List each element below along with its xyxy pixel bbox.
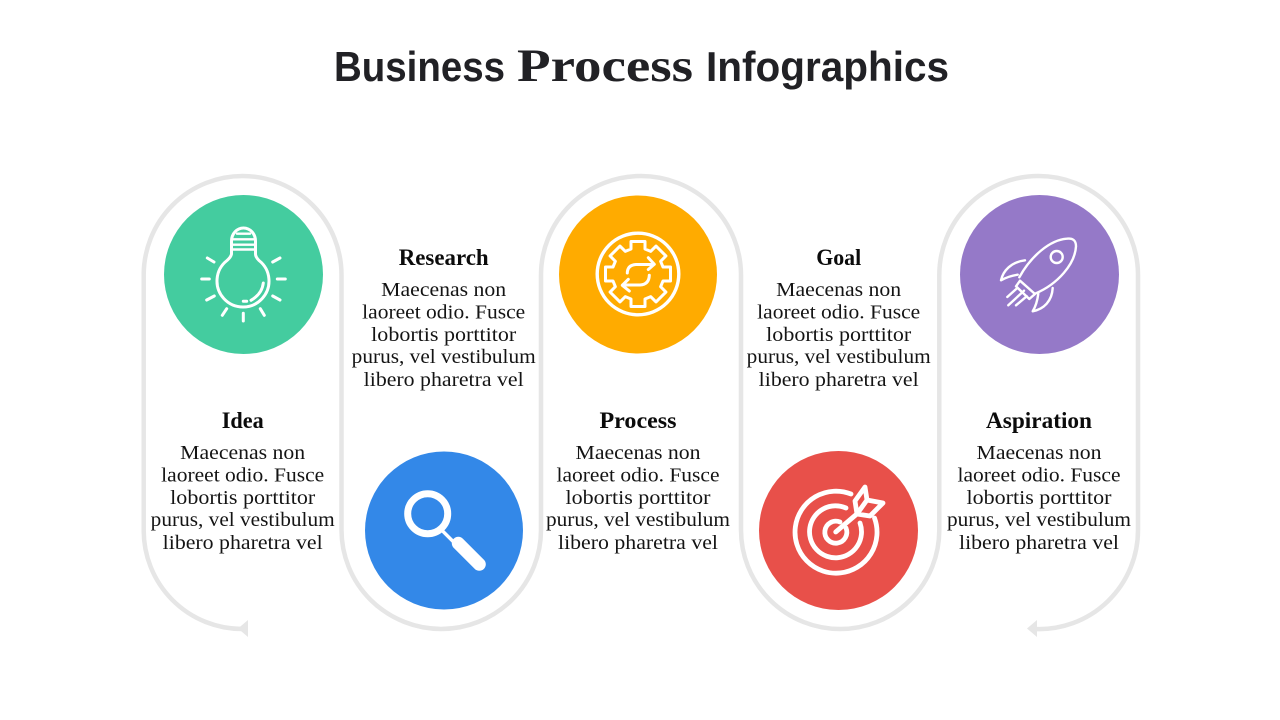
purple circle bbox=[960, 195, 1119, 354]
icon: rocket bbox=[1001, 239, 1076, 311]
text block: aspiration: purus, vel vestibulum bbox=[947, 509, 1131, 531]
arrow: left path end bbox=[238, 620, 248, 637]
text block: research: laoreet odio. Fusce bbox=[362, 302, 525, 324]
text block: process: libero pharetra vel bbox=[558, 532, 718, 554]
title: Business bbox=[334, 43, 505, 90]
text block: research bbox=[352, 279, 536, 391]
red circle bbox=[759, 451, 918, 610]
panel: goal bbox=[747, 245, 931, 610]
heading: research: Research bbox=[399, 245, 489, 270]
panel: aspiration bbox=[947, 195, 1131, 554]
text block: research: lobortis porttitor bbox=[371, 324, 516, 346]
text block: goal: laoreet odio. Fusce bbox=[757, 302, 920, 324]
text block: process: purus, vel vestibulum bbox=[546, 509, 730, 531]
orange circle bbox=[559, 196, 717, 354]
heading: goal: Goal bbox=[816, 245, 861, 270]
text block: idea: lobortis porttitor bbox=[170, 487, 315, 509]
text block: goal bbox=[747, 279, 931, 391]
text block: idea bbox=[151, 442, 335, 554]
text block: idea: laoreet odio. Fusce bbox=[161, 464, 324, 486]
serpentine connector path bbox=[144, 176, 1138, 629]
text block: aspiration: Maecenas non bbox=[976, 442, 1102, 464]
text block: goal: libero pharetra vel bbox=[759, 369, 919, 391]
text block: research: libero pharetra vel bbox=[364, 369, 524, 391]
title: Process bbox=[517, 40, 693, 92]
text block: process: lobortis porttitor bbox=[566, 487, 711, 509]
text block: process bbox=[546, 442, 730, 554]
panel: idea bbox=[151, 195, 335, 554]
text block: idea: libero pharetra vel bbox=[163, 532, 323, 554]
icon: light bulb bbox=[202, 228, 285, 321]
icon: target with arrow bbox=[795, 487, 883, 573]
text block: research: Maecenas non bbox=[381, 279, 506, 301]
text block: goal: Maecenas non bbox=[776, 279, 901, 301]
title bbox=[334, 40, 949, 92]
heading: process: Process bbox=[600, 408, 677, 433]
icon: gear with arrows bbox=[597, 233, 679, 315]
text block: aspiration bbox=[947, 442, 1131, 554]
arrow: right path end bbox=[1027, 620, 1037, 637]
text block: research: purus, vel vestibulum bbox=[352, 346, 536, 368]
panel: process bbox=[546, 196, 730, 554]
icon: magnifying glass bbox=[408, 494, 479, 564]
text block: goal: purus, vel vestibulum bbox=[747, 346, 931, 368]
text block: process: laoreet odio. Fusce bbox=[556, 464, 720, 486]
text block: aspiration: lobortis porttitor bbox=[966, 487, 1112, 509]
text block: aspiration: libero pharetra vel bbox=[959, 532, 1119, 554]
panel: research bbox=[352, 245, 536, 610]
text block: aspiration: laoreet odio. Fusce bbox=[958, 464, 1120, 486]
text block: idea: purus, vel vestibulum bbox=[151, 509, 335, 531]
blue circle bbox=[365, 452, 523, 610]
text block: process: Maecenas non bbox=[576, 442, 700, 464]
title: Infographics bbox=[706, 43, 949, 90]
green circle bbox=[164, 195, 323, 354]
text block: idea: Maecenas non bbox=[180, 442, 305, 464]
text block: goal: lobortis porttitor bbox=[766, 324, 911, 346]
heading: idea: Idea bbox=[222, 408, 264, 433]
heading: aspiration: Aspiration bbox=[986, 408, 1092, 433]
